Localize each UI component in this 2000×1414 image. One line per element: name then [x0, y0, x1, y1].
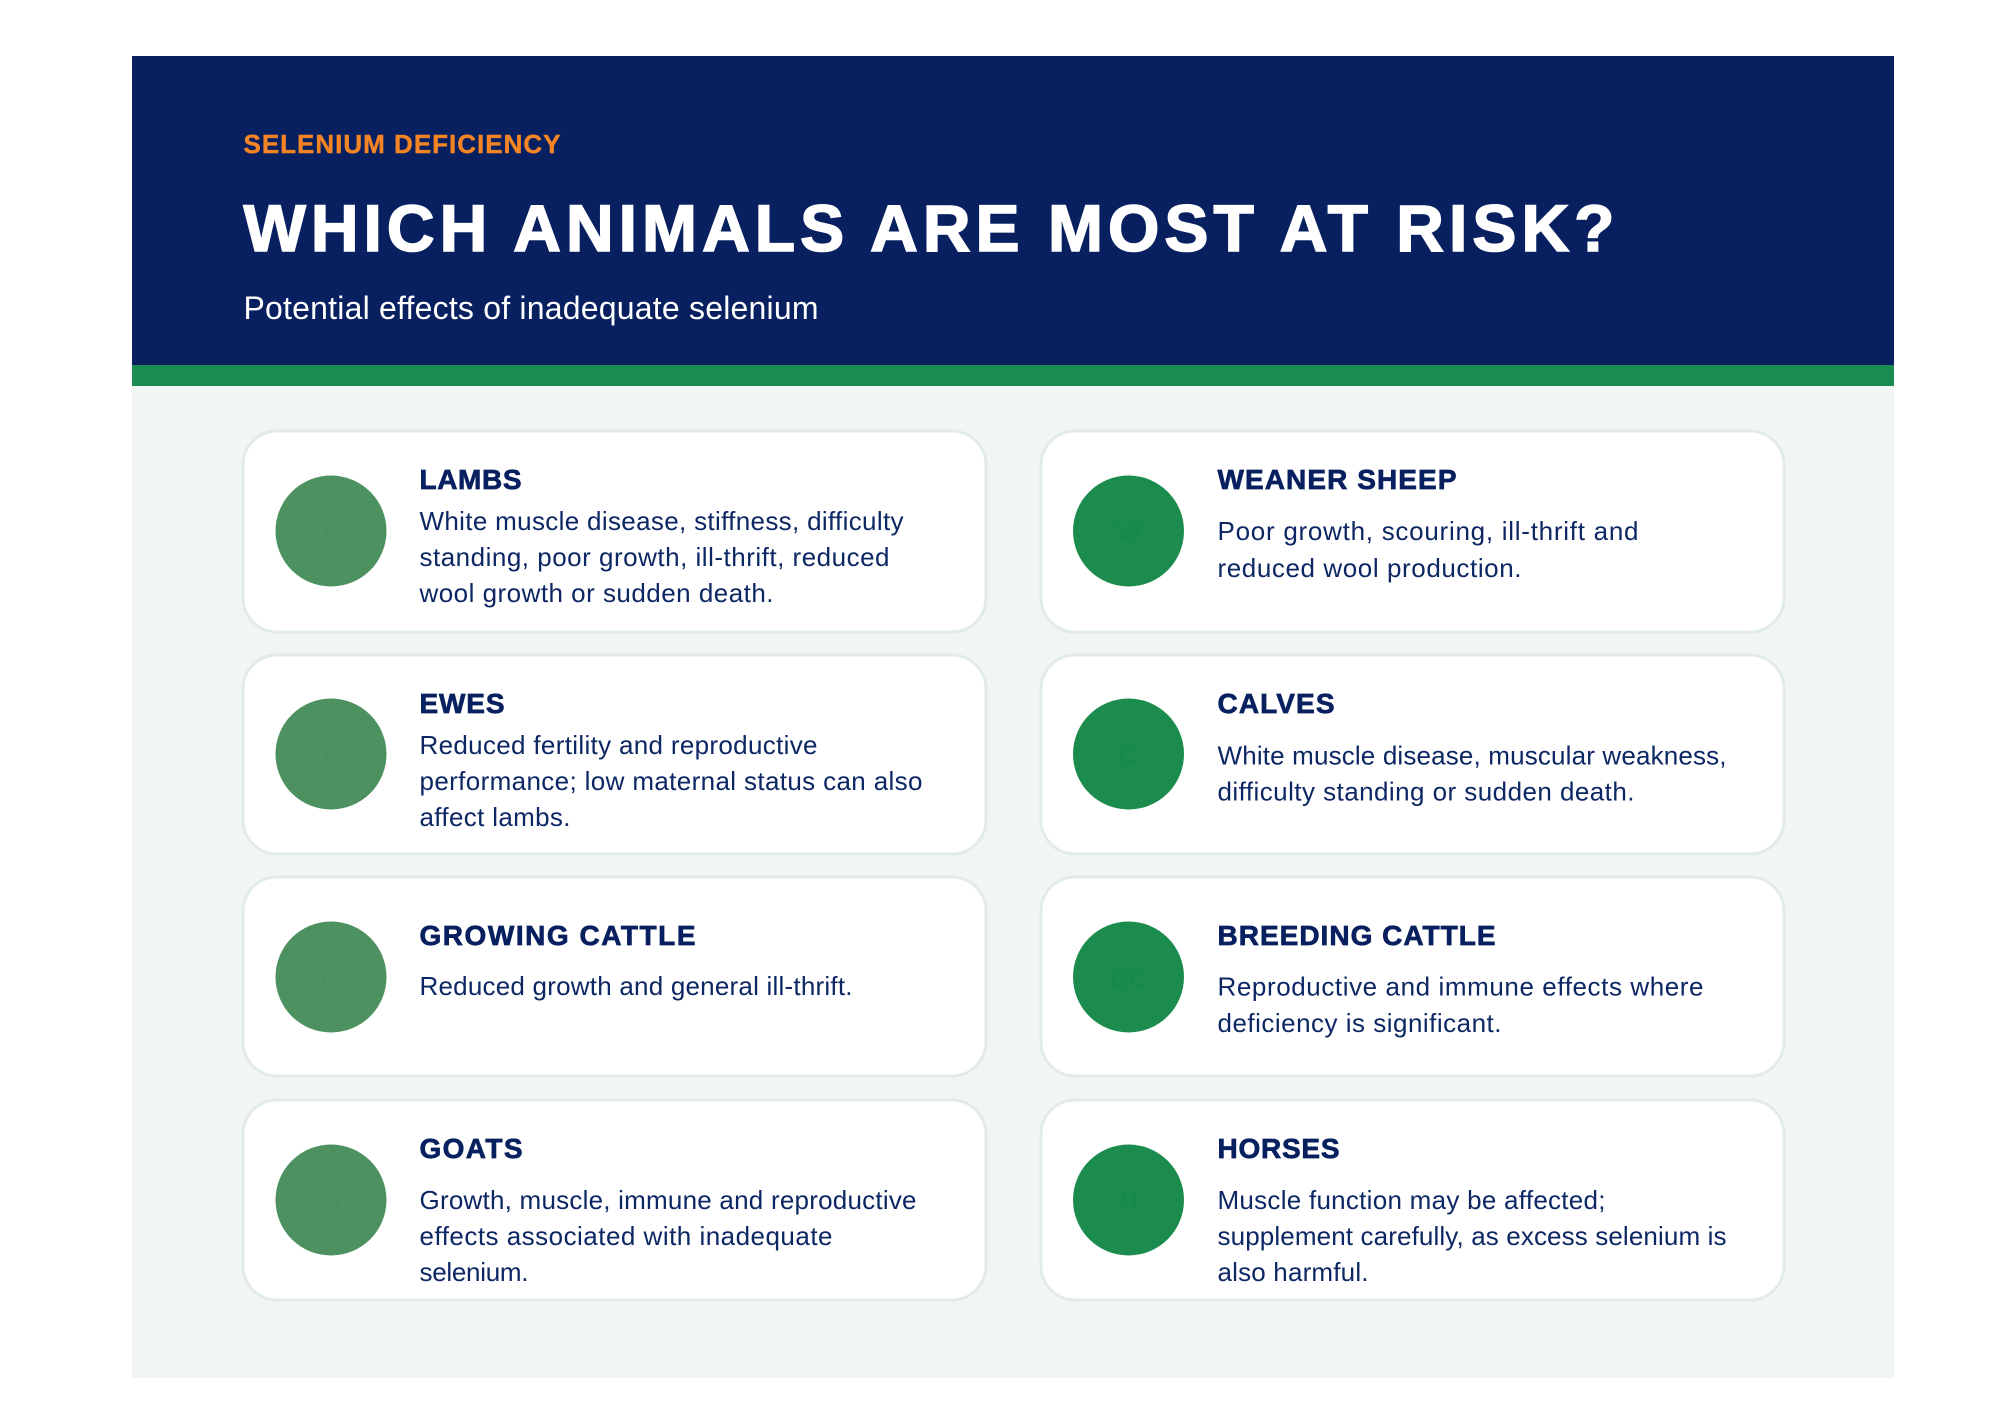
text: calves effects: difficulty standing or sudden death. [1218, 776, 1634, 806]
card: breeding cattle [1041, 877, 1784, 1076]
text: breeding cattle effects: deficiency is significant. [1218, 1008, 1502, 1038]
card: weaner sheep [1041, 431, 1784, 632]
heading: growing cattle: GROWING CATTLE [420, 920, 696, 951]
subtitle: Potential effects of inadequate selenium [244, 290, 818, 326]
eyebrow: SELENIUM DEFICIENCY [244, 129, 560, 159]
text: lambs effects: wool growth or sudden death. [418, 578, 774, 608]
text: goats effects: selenium. [420, 1257, 528, 1287]
icon: calves badge: C [1119, 740, 1138, 770]
text: calves effects: White muscle disease, muscular weakness, [1218, 740, 1726, 770]
text: calves effects [1218, 740, 1726, 806]
text: horses effects [1218, 1185, 1726, 1287]
title: WHICH ANIMALS ARE MOST AT RISK? [244, 191, 1614, 265]
card: calves [1041, 655, 1784, 854]
text: weaner sheep effects: Poor growth, scouring, ill-thrift and [1218, 516, 1638, 546]
text: weaner sheep effects: reduced wool production. [1218, 553, 1522, 583]
icon: lambs badge [276, 476, 386, 586]
card: growing cattle [243, 877, 986, 1076]
icon: growing cattle badge [276, 922, 386, 1032]
icon: lambs badge: L [323, 517, 339, 547]
text: ewes effects: affect lambs. [420, 802, 570, 832]
icon: goats badge [276, 1144, 386, 1256]
icon: ewes badge: E [322, 740, 340, 770]
text: ewes effects: Reduced fertility and reproductive [420, 730, 818, 760]
text: lambs effects: White muscle disease, stiffness, difficulty [420, 506, 904, 536]
icon: horses badge: H [1119, 1186, 1138, 1216]
card: goats [243, 1100, 986, 1300]
text: lambs effects: standing, poor growth, ill-thrift, reduced [420, 542, 890, 572]
heading: calves: CALVES [1218, 688, 1334, 719]
green accent bar [132, 365, 1894, 386]
heading: horses: HORSES [1218, 1133, 1340, 1164]
text: goats effects: Growth, muscle, immune and reproductive [420, 1185, 916, 1215]
text: ewes effects [420, 730, 922, 832]
heading: goats: GOATS [420, 1133, 522, 1164]
text: horses effects: also harmful. [1218, 1257, 1368, 1287]
icon: breeding cattle badge [1073, 922, 1184, 1032]
text: horses effects: supplement carefully, as excess selenium is [1218, 1221, 1726, 1251]
card: ewes [243, 655, 986, 854]
text: weaner sheep effects [1218, 516, 1638, 583]
text: growing cattle effects: Reduced growth and general ill-thrift. [420, 971, 852, 1001]
text: goats effects: effects associated with inadequate [420, 1221, 832, 1251]
heading: weaner sheep: WEANER SHEEP [1218, 464, 1456, 495]
text: horses effects: Muscle function may be affected; [1218, 1185, 1606, 1215]
text: lambs effects [418, 506, 904, 608]
heading: lambs: LAMBS [420, 464, 522, 495]
panel: content background [132, 386, 1894, 1378]
icon: horses badge [1073, 1144, 1184, 1256]
icon: goats badge: G [321, 1186, 341, 1216]
card: horses [1041, 1100, 1784, 1300]
text: breeding cattle effects [1218, 972, 1704, 1038]
text: breeding cattle effects: Reproductive and immune effects where [1218, 972, 1704, 1002]
icon: breeding cattle badge: BC [1110, 963, 1147, 993]
icon: calves badge [1073, 698, 1184, 810]
icon: weaner sheep badge: W [1116, 517, 1141, 547]
icon: growing cattle badge: G [321, 963, 341, 993]
card: lambs [243, 431, 986, 632]
heading: breeding cattle: BREEDING CATTLE [1218, 920, 1496, 951]
icon: ewes badge [276, 698, 386, 810]
heading: ewes: EWES [420, 688, 504, 719]
text: ewes effects: performance; low maternal status can also [420, 766, 922, 796]
text: goats effects [420, 1185, 916, 1287]
header banner [132, 56, 1894, 366]
icon: weaner sheep badge [1073, 476, 1184, 586]
